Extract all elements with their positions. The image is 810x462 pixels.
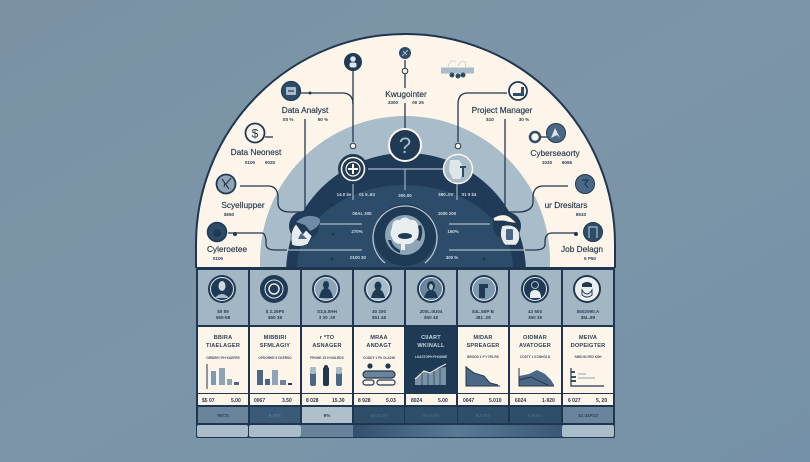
- label: UI Developers: 8533: [576, 212, 587, 217]
- column 8: $5L.89: [581, 315, 596, 320]
- column 4: ANDAGT: [366, 343, 392, 349]
- area chart: [519, 368, 554, 386]
- column 8: SMB H4 FED KSH: [575, 355, 602, 359]
- inner dome figures: 0100 30: [350, 255, 366, 260]
- column 7: 1-920: [542, 398, 555, 404]
- chart: horizontal: [571, 368, 604, 386]
- label: Job Design: [561, 244, 603, 261]
- central emblem: [373, 204, 437, 266]
- label: Data Analyst: S0 %: [283, 117, 293, 122]
- column 6: $4L.50P B: [472, 309, 495, 314]
- column 1: TIAELAGER: [206, 343, 240, 349]
- label: Knowledge: 00 25: [412, 100, 424, 105]
- column 2: [249, 270, 301, 437]
- icon: job design: [574, 222, 602, 242]
- column 5: 5.00: [438, 398, 448, 404]
- column 7: 6024: [515, 398, 526, 404]
- inner dome figures: [337, 192, 477, 260]
- avatar: [521, 275, 549, 303]
- column 1: OIRDER I PH KAEFRE: [206, 356, 240, 360]
- column 8: 5, 20: [596, 398, 607, 404]
- inner dome figures: 300 %: [446, 255, 458, 260]
- column 4: 40 200: [372, 309, 386, 314]
- column 2: $ 2.25P0: [266, 309, 285, 314]
- column 1: $5 07: [202, 398, 215, 404]
- column 1: BBIRA: [214, 335, 232, 341]
- inner band: [297, 185, 513, 268]
- icon: question mark: [389, 129, 421, 161]
- icon: devices group: [441, 61, 474, 78]
- bar chart: [257, 370, 292, 385]
- label: Project Manager: [472, 105, 533, 122]
- column 7: COSTY 1 KCNHOLD: [520, 355, 551, 359]
- column 1: $50-58: [216, 315, 231, 320]
- column 2: 6.00S: [269, 413, 281, 418]
- column 6: MIDAR: [473, 335, 493, 341]
- icon: project manager: [503, 82, 527, 100]
- label: Data Neonest: [231, 147, 282, 165]
- column 3: ASNAGER: [312, 343, 342, 349]
- icon: person top: [344, 53, 362, 71]
- column 5: $50 48: [424, 315, 438, 320]
- column 3: 9%: [324, 413, 330, 418]
- label: Cyber left: Cyleroetee: [207, 244, 247, 254]
- column 7: AVATOGER: [519, 343, 551, 349]
- label: Skill Upper: Scyellupper: [221, 200, 265, 210]
- inner dome figures: 14.0 $e: [337, 192, 352, 197]
- label: Data Neonest: Data Neonest: [231, 147, 282, 157]
- column 5: 200L.0U04: [420, 309, 443, 314]
- light outer band: [260, 116, 550, 268]
- icon: dollar: [246, 124, 273, 142]
- column 4: CODDY 1 Ph OLAZHI: [363, 356, 395, 360]
- table frame: [196, 267, 615, 438]
- column 6: 5.010: [489, 398, 502, 404]
- column 5: CIIART: [421, 335, 441, 341]
- label: Skill Upper: [221, 200, 265, 217]
- column 6: 0047: [463, 398, 474, 404]
- column 2: $50 38: [268, 315, 282, 320]
- label: UI Developers: ur Dresitars: [545, 200, 587, 210]
- bar chart: [207, 364, 239, 389]
- column 5: [405, 270, 457, 423]
- icon: skill: [216, 174, 236, 194]
- column 1: 90CS: [217, 413, 229, 418]
- icon: cyber right: [530, 124, 566, 142]
- label: Cyber left: 0100: [213, 256, 224, 261]
- column 2: SFMLAGIY: [260, 343, 290, 349]
- icon: data analyst: [282, 82, 312, 100]
- avatar: [470, 275, 498, 303]
- dark middle band: [286, 153, 526, 273]
- inner dome figures: 270%: [351, 229, 363, 234]
- label: Knowledge: [385, 89, 427, 105]
- label: Cybersecurity: 1020: [542, 160, 553, 165]
- label: Skill Upper: $650: [224, 212, 235, 217]
- icon: dollar: $: [252, 126, 259, 140]
- label: Data Analyst: 50 %: [318, 117, 328, 122]
- column 3: [301, 270, 353, 437]
- column 4: 8 928: [358, 398, 371, 404]
- inner dome figures: 300.00: [398, 193, 412, 198]
- avatar: [573, 275, 601, 303]
- column 3: FROHE 1S H NOLRDS: [310, 356, 344, 360]
- column 3: 8 028: [306, 398, 319, 404]
- column 1: [197, 270, 248, 437]
- column 5: 8024: [411, 398, 422, 404]
- column 5: WKINALL: [417, 343, 445, 349]
- label: Cybersecurity: [530, 148, 581, 165]
- icon: right emblem: [444, 143, 472, 184]
- label: Cyber left: [207, 244, 247, 261]
- icon: left hand: [289, 211, 320, 246]
- column 8: $502090.A: [577, 309, 600, 314]
- label: Project Manager: Project Manager: [472, 105, 533, 115]
- area chart: [415, 364, 446, 385]
- avatar: [208, 275, 236, 303]
- connector lines: [228, 60, 575, 250]
- column 6: BRODD 1 P Y FELRS: [467, 355, 499, 359]
- column 6: 8.0790: [476, 413, 490, 418]
- column 5: $0.0190: [423, 413, 440, 418]
- column 4: [354, 270, 404, 423]
- label: UI Developers: [545, 200, 587, 217]
- icon: question mark: ?: [399, 133, 411, 158]
- label: Data Neonest: 0020: [265, 160, 276, 165]
- icon: figures: [310, 365, 342, 386]
- column 7: 8.6093: [528, 413, 542, 418]
- icon: cyber left: [208, 222, 237, 242]
- icon: left target: [338, 143, 368, 184]
- icon: team: [363, 363, 395, 385]
- area chart: [466, 366, 500, 386]
- column 4: 5.03: [386, 398, 396, 404]
- column 3: r *TO: [320, 335, 335, 341]
- column 7: 43 500: [528, 309, 542, 314]
- column 7: [510, 270, 561, 423]
- label: Data Analyst: Data Analyst: [282, 105, 329, 115]
- dome panel: [196, 34, 615, 273]
- icon: right hand: [493, 212, 521, 245]
- column 8: DOPEIGTER: [571, 343, 605, 349]
- column 2: OPDORHE 9 CKERSO: [258, 356, 292, 360]
- label: Data Neonest: 0100: [245, 160, 256, 165]
- column 2: 0067: [254, 398, 265, 404]
- column 7: 350 35: [528, 315, 542, 320]
- icon: developers right: [576, 174, 594, 194]
- label: Knowledge: 3300: [388, 100, 399, 105]
- inner dome figures: 01 5..84: [359, 192, 375, 197]
- label: Cybersecurity: Cyberseaorty: [530, 148, 581, 158]
- column 6: SPREAGER: [466, 343, 500, 349]
- column 1: 5.00: [231, 398, 241, 404]
- column 2: 3.50: [282, 398, 292, 404]
- avatar: [364, 275, 392, 303]
- column 1: $0 89: [217, 309, 229, 314]
- inner dome figures: 160%: [447, 229, 459, 234]
- avatar: [417, 275, 445, 303]
- label: Project Manager: $10: [486, 117, 494, 122]
- column 8: MEIVA: [579, 335, 597, 341]
- column 8: [562, 270, 614, 437]
- column 4: $0.0120: [371, 413, 388, 418]
- column 5: LKASTOPH FHODME: [415, 355, 447, 359]
- column 6: [458, 270, 508, 423]
- label: Data Analyst: [282, 105, 329, 122]
- column 3: 3 30 .30: [319, 315, 336, 320]
- inner dome figures: 00AL 200: [352, 211, 372, 216]
- column 8: 6 027: [568, 398, 581, 404]
- label: Job Design: 5 P50: [584, 256, 596, 261]
- footer band: [353, 425, 562, 437]
- band dots: [331, 204, 486, 260]
- icon: knowledge small: [399, 47, 411, 74]
- label: Knowledge: Kwugointer: [385, 89, 427, 99]
- column 4: $51 48: [372, 315, 386, 320]
- column 7: OIDMAR: [523, 335, 547, 341]
- column 3: 15.30: [332, 398, 345, 404]
- column 2: MIBBIRI: [264, 335, 287, 341]
- label: Cybersecurity: 6065: [562, 160, 573, 165]
- inner dome figures: $90..0V: [438, 192, 454, 197]
- inner dome figures: 1000 200: [438, 211, 457, 216]
- label: Job Design: Job Delagn: [561, 244, 603, 254]
- avatar: [260, 275, 288, 303]
- column 6: J81 .28: [475, 315, 491, 320]
- column 3: S3,5.0HH: [317, 309, 338, 314]
- avatar: [312, 275, 340, 303]
- inner dome figures: 01 0 $4: [462, 192, 477, 197]
- label: Project Manager: 30 %: [519, 117, 529, 122]
- column 8: $1 41P23: [578, 413, 598, 418]
- column 4: MRAA: [370, 335, 388, 341]
